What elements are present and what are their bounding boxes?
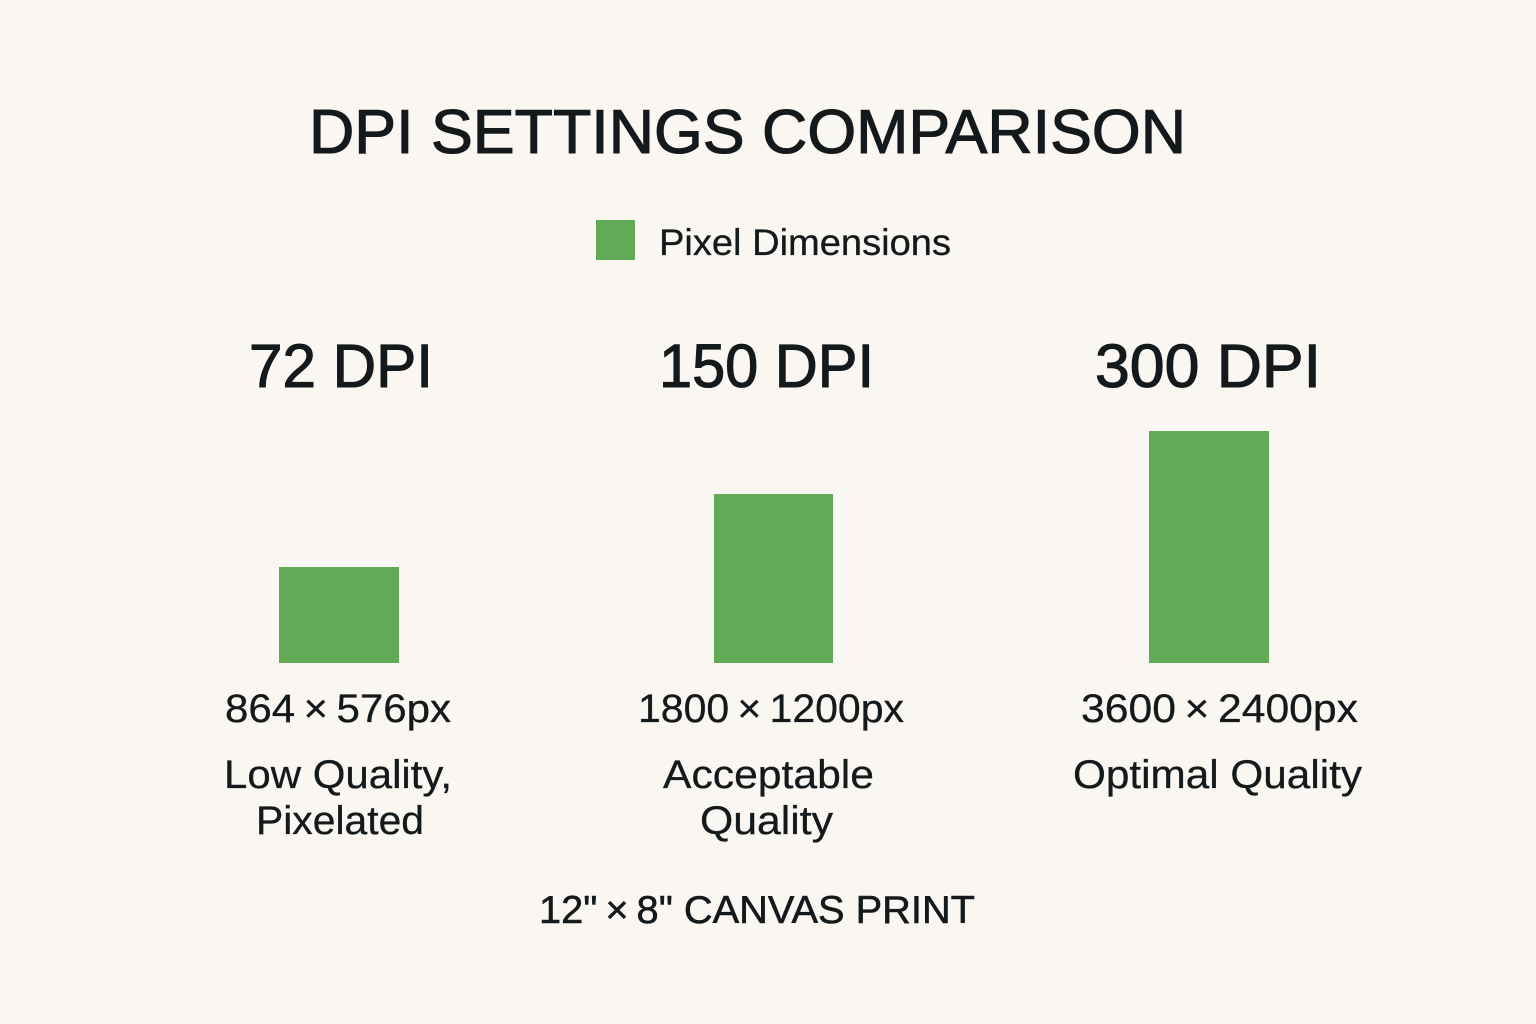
quality note: 72 DPI: Pixelated (256, 799, 424, 843)
heading: 300 DPI: 300 DPI (1095, 332, 1321, 400)
title: DPI SETTINGS COMPARISON (309, 98, 1186, 167)
column: 300 DPI (1073, 332, 1362, 797)
legend label: Pixel Dimensions (659, 222, 951, 263)
bar: 72 DPI (279, 567, 399, 663)
quality note: 150 DPI: Acceptable (663, 753, 874, 797)
quality note: 150 DPI (663, 753, 874, 843)
heading: 72 DPI: 72 DPI (249, 332, 433, 400)
legend (596, 220, 951, 263)
quality note: 72 DPI (224, 753, 452, 843)
pixel dimensions: 150 DPI: 1800 × 1200px (638, 687, 904, 731)
bar: 300 DPI (1149, 431, 1269, 663)
bar: 150 DPI (714, 494, 833, 663)
column: 72 DPI (224, 332, 452, 843)
heading: 150 DPI: 150 DPI (659, 332, 874, 400)
column: 150 DPI (638, 332, 904, 843)
quality note: 72 DPI: Low Quality, (224, 753, 452, 797)
quality note: 150 DPI: Quality (700, 799, 833, 843)
pixel dimensions: 300 DPI: 3600 × 2400px (1081, 687, 1358, 731)
footer caption: 12" × 8" CANVAS PRINT (539, 889, 975, 932)
legend swatch (596, 220, 635, 260)
pixel dimensions: 72 DPI: 864 × 576px (225, 687, 451, 731)
quality note: 300 DPI: Optimal Quality (1073, 753, 1362, 797)
